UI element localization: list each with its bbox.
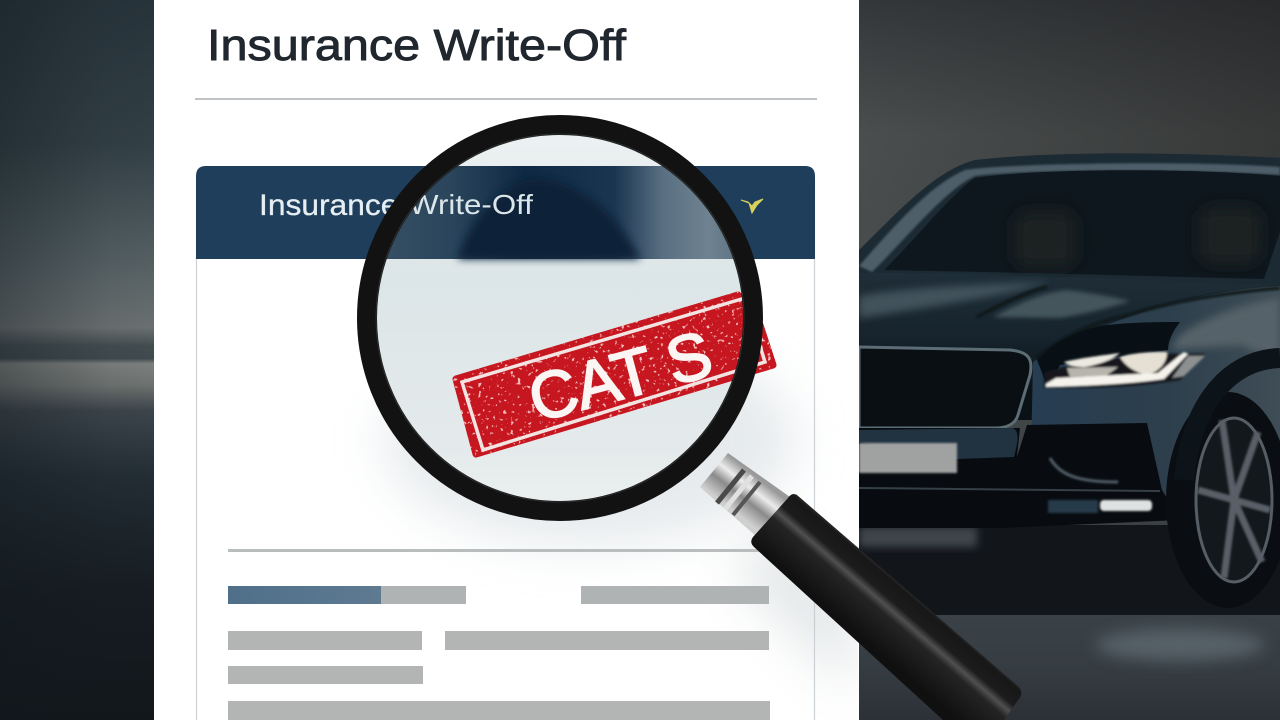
metal ferrule: [700, 453, 790, 537]
header check icon: [741, 199, 763, 213]
car grille: [859, 347, 1031, 428]
document title: Insurance Write-Off: [207, 21, 627, 70]
panel header text: Insurance Write-Off: [259, 189, 534, 222]
navy panel header: [196, 166, 815, 259]
blurred left background: [0, 0, 155, 720]
number plate: [859, 443, 957, 473]
form panel: [196, 166, 815, 720]
stamp inner border: [462, 298, 765, 450]
section divider: [228, 549, 763, 552]
stamp label: CAT S: [521, 316, 720, 436]
car front wheel: [1166, 358, 1280, 608]
car body side panel: [1032, 286, 1280, 496]
title rule: [195, 98, 817, 100]
car lower bumper and fog lamp: [859, 423, 1180, 528]
lens rim: [367, 125, 753, 511]
magnifying glass: [367, 125, 1021, 720]
placeholder text bars: [228, 586, 770, 720]
car headlight: [1044, 352, 1205, 388]
magnified header band: [386, 166, 734, 259]
car hood: [859, 276, 1184, 420]
photo of dark blue car: [859, 153, 1280, 608]
black handle: [751, 494, 1021, 720]
document page: [154, 0, 860, 720]
stamp speckle texture: [453, 292, 774, 458]
background behind car: [859, 0, 1280, 720]
soft shadow under magnifier: [379, 372, 858, 675]
magnified header text: Write-Off: [409, 189, 533, 220]
car windshield and roof: [859, 153, 1280, 300]
lens reflection: [458, 179, 640, 259]
magnified lens contents: [377, 135, 742, 426]
red CAT S stamp: [452, 292, 776, 458]
